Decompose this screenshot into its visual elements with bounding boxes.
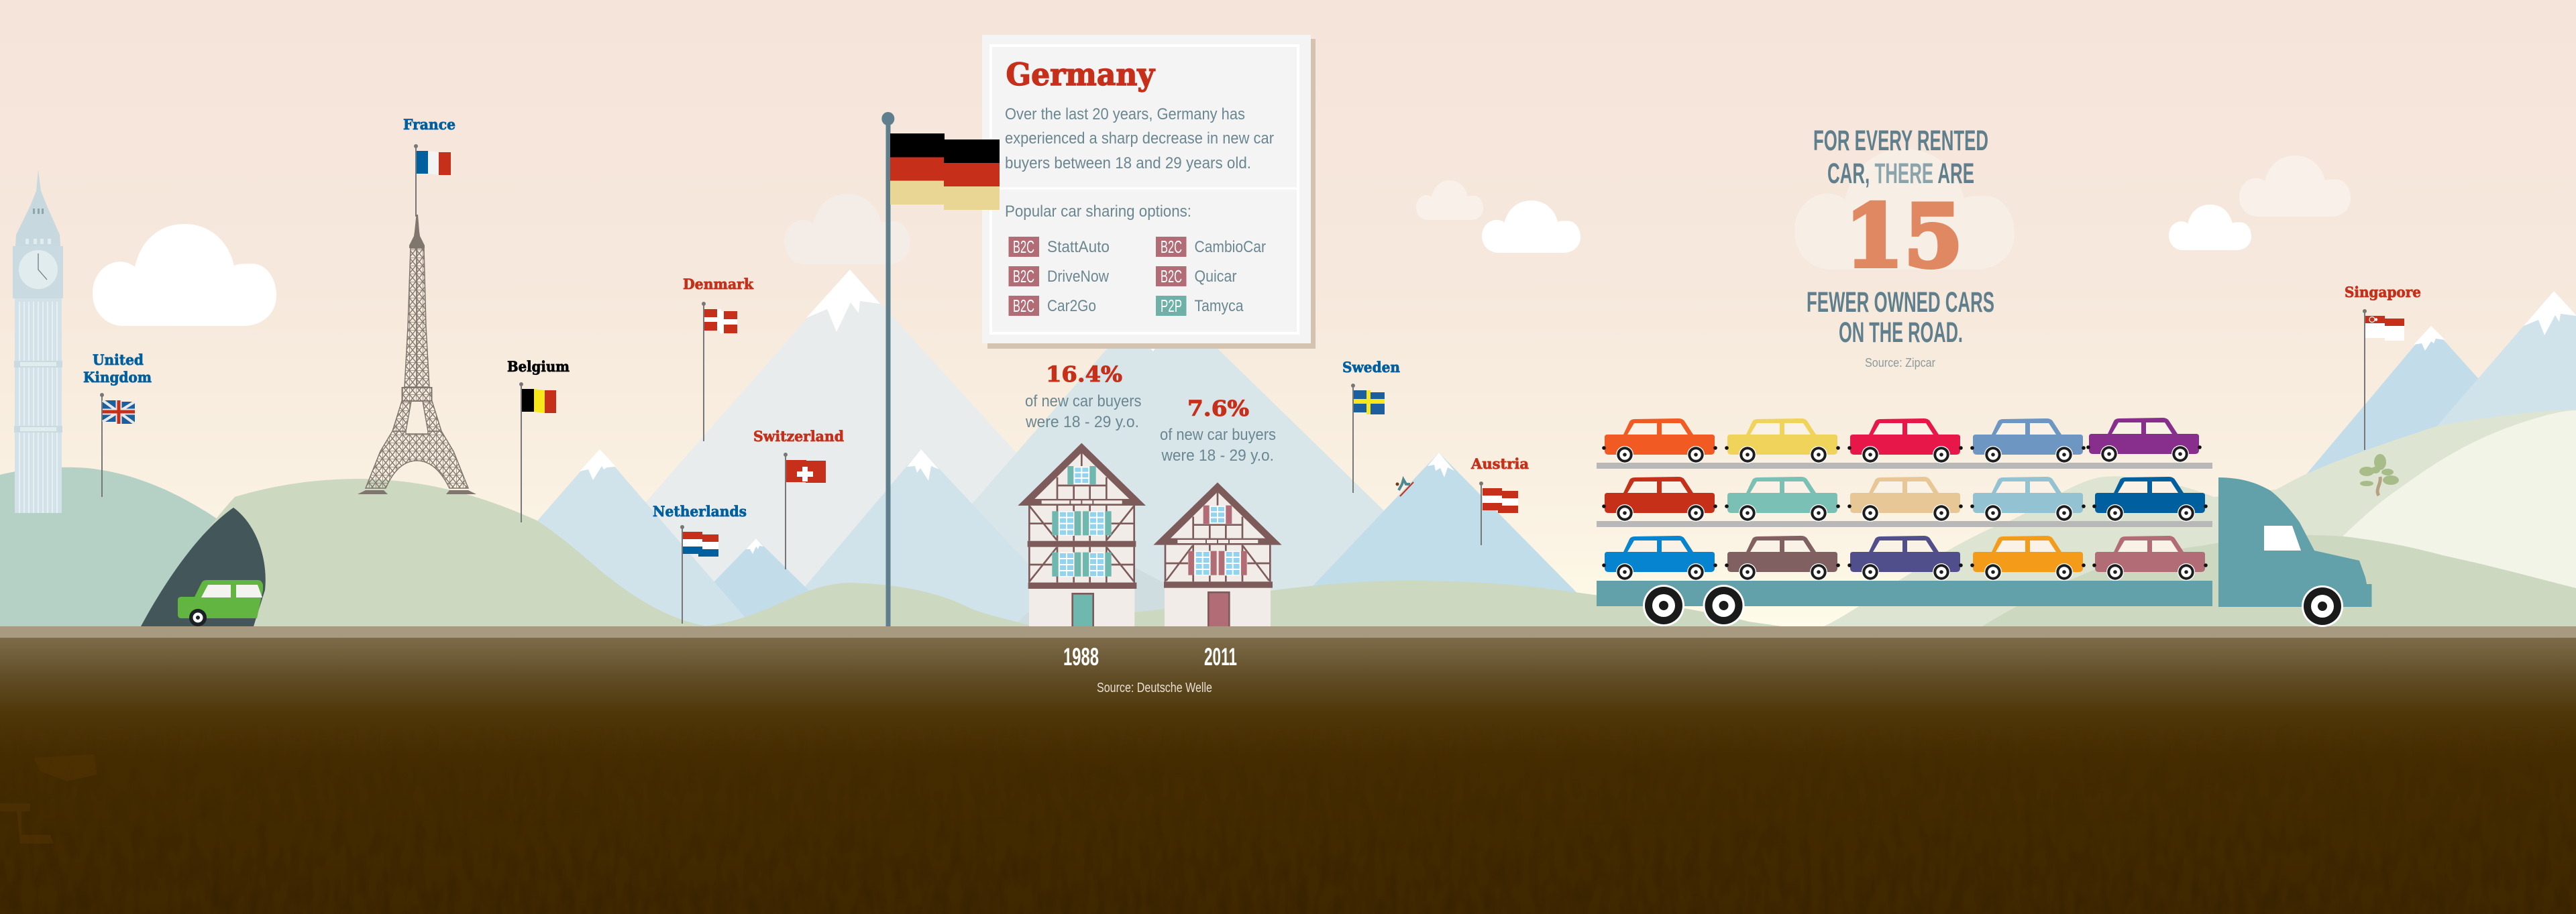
- cloud: pale behind flagpole: [784, 194, 910, 264]
- statistic: 2011: [1160, 396, 1276, 465]
- car transporter truck: [1597, 418, 2372, 627]
- flag: Germany: [890, 133, 1000, 210]
- statistic: 2011: 7.6%: [1187, 396, 1249, 421]
- statistic: rented versus owned cars: ON THE ROAD.: [1839, 317, 1963, 349]
- cars: middle row: [1602, 477, 2208, 522]
- statistic: rented versus owned cars: Source: Zipcar: [1865, 356, 1935, 369]
- label: France: France: [403, 116, 455, 133]
- skier on mountain: [1395, 479, 1413, 496]
- cloud: pale right: [2239, 156, 2351, 217]
- car sharing list: B2C: [1013, 266, 1034, 286]
- intro paragraph: buyers between 18 and 29 years old.: [1005, 154, 1251, 172]
- flag: Sweden: [1351, 384, 1385, 493]
- statistic: rented versus owned cars: 15: [1845, 186, 1963, 287]
- flag: Denmark: [702, 302, 737, 441]
- car sharing list: CambioCar: [1194, 238, 1266, 256]
- statistic: rented versus owned cars: [1807, 125, 1994, 369]
- house: 1988: [1018, 443, 1146, 626]
- heading: Germany: Germany: [1006, 56, 1155, 93]
- car sharing list: B2C: [1013, 296, 1034, 316]
- label: Belgium: Belgium: [507, 358, 570, 375]
- cloud: white centre right: [1482, 201, 1580, 253]
- icon: green car: [178, 580, 263, 626]
- truck wheels: [1643, 585, 2343, 627]
- icon: bonsai tree: [2359, 454, 2399, 496]
- flag: Singapore: [2363, 309, 2404, 450]
- flag: France: [414, 144, 451, 217]
- year label: 2011: 2011: [1204, 643, 1237, 671]
- statistic: rented versus owned cars: CAR, THERE ARE: [1827, 158, 1974, 190]
- car sharing list: B2C: [1161, 237, 1182, 257]
- car sharing list: P2P: [1161, 296, 1182, 316]
- hills: [0, 410, 2576, 626]
- flag: Austria: [1479, 481, 1518, 545]
- road strip: [0, 626, 2576, 638]
- label: Sweden: Sweden: [1342, 359, 1400, 376]
- label: United Kingdom: Kingdom: [83, 369, 152, 386]
- car sharing list: B2C: [1161, 266, 1182, 286]
- flag: Switzerland: [784, 453, 826, 569]
- landmark: Big Ben clock tower: [13, 170, 63, 513]
- label: United Kingdom: United: [93, 351, 144, 368]
- sky background: [0, 0, 2576, 630]
- statistic: 1988: were 18 - 29 y.o.: [1025, 413, 1139, 431]
- source: Deutsche Welle: Source: Deutsche Welle: [1097, 681, 1212, 695]
- label: United Kingdom: [83, 351, 152, 386]
- intro paragraph: experienced a sharp decrease in new car: [1005, 129, 1274, 148]
- car sharing list: DriveNow: [1047, 268, 1110, 286]
- statistic: 1988: [1025, 361, 1142, 431]
- cloud: large white left: [93, 224, 276, 326]
- car sharing list: B2C: [1013, 237, 1034, 257]
- mountain snow caps: [580, 270, 2576, 554]
- truck cab: [2218, 477, 2372, 607]
- statistic: rented versus owned cars: FEWER OWNED CARS: [1807, 286, 1994, 319]
- statistic: 2011: were 18 - 29 y.o.: [1161, 447, 1274, 465]
- statistic: rented versus owned cars: FOR EVERY RENTED: [1813, 125, 1988, 157]
- label: Singapore: Singapore: [2345, 284, 2421, 300]
- label: Denmark: Denmark: [683, 276, 753, 292]
- cloud: pale centre right: [1416, 180, 1483, 220]
- car sharing list: StattAuto: [1047, 238, 1110, 256]
- year label: 1988: 1988: [1063, 643, 1099, 671]
- statistic: 2011: of new car buyers: [1160, 426, 1276, 444]
- house: 2011: [1153, 482, 1282, 626]
- German flagpole: [881, 112, 894, 626]
- subheading: car sharing options: Popular car sharing options:: [1005, 203, 1191, 221]
- flag: Netherlands: [680, 525, 718, 624]
- label: Switzerland: Switzerland: [753, 428, 844, 445]
- statistic: 1988: 16.4%: [1046, 361, 1122, 387]
- cars: bottom row: [1602, 536, 2208, 581]
- label: Netherlands: Netherlands: [653, 503, 747, 520]
- underground soil: [0, 638, 2576, 914]
- cloud: white right: [2169, 205, 2251, 250]
- trailer bed: [1597, 581, 2212, 606]
- flag: United Kingdom: [100, 393, 135, 497]
- car sharing list: Tamyca: [1194, 297, 1244, 315]
- cars: top row: [1602, 418, 2202, 463]
- car sharing list: Car2Go: [1047, 297, 1096, 315]
- label: Austria: Austria: [1470, 455, 1529, 472]
- car sharing list: [1009, 237, 1266, 316]
- car sharing list: Quicar: [1194, 268, 1237, 286]
- statistic: 1988: of new car buyers: [1025, 392, 1142, 410]
- panel: Germany: [982, 35, 1316, 349]
- flag: Belgium: [519, 382, 556, 522]
- mountains: back range: [436, 270, 2576, 637]
- tunnel with green car: [141, 508, 266, 626]
- cloud: behind statistic: [1794, 149, 2015, 270]
- clouds: [93, 149, 2351, 326]
- landmark: Eiffel Tower: [358, 215, 476, 494]
- intro paragraph: [1005, 105, 1274, 172]
- intro paragraph: Over the last 20 years, Germany has: [1005, 105, 1245, 123]
- trailer shelves: [1597, 463, 2212, 527]
